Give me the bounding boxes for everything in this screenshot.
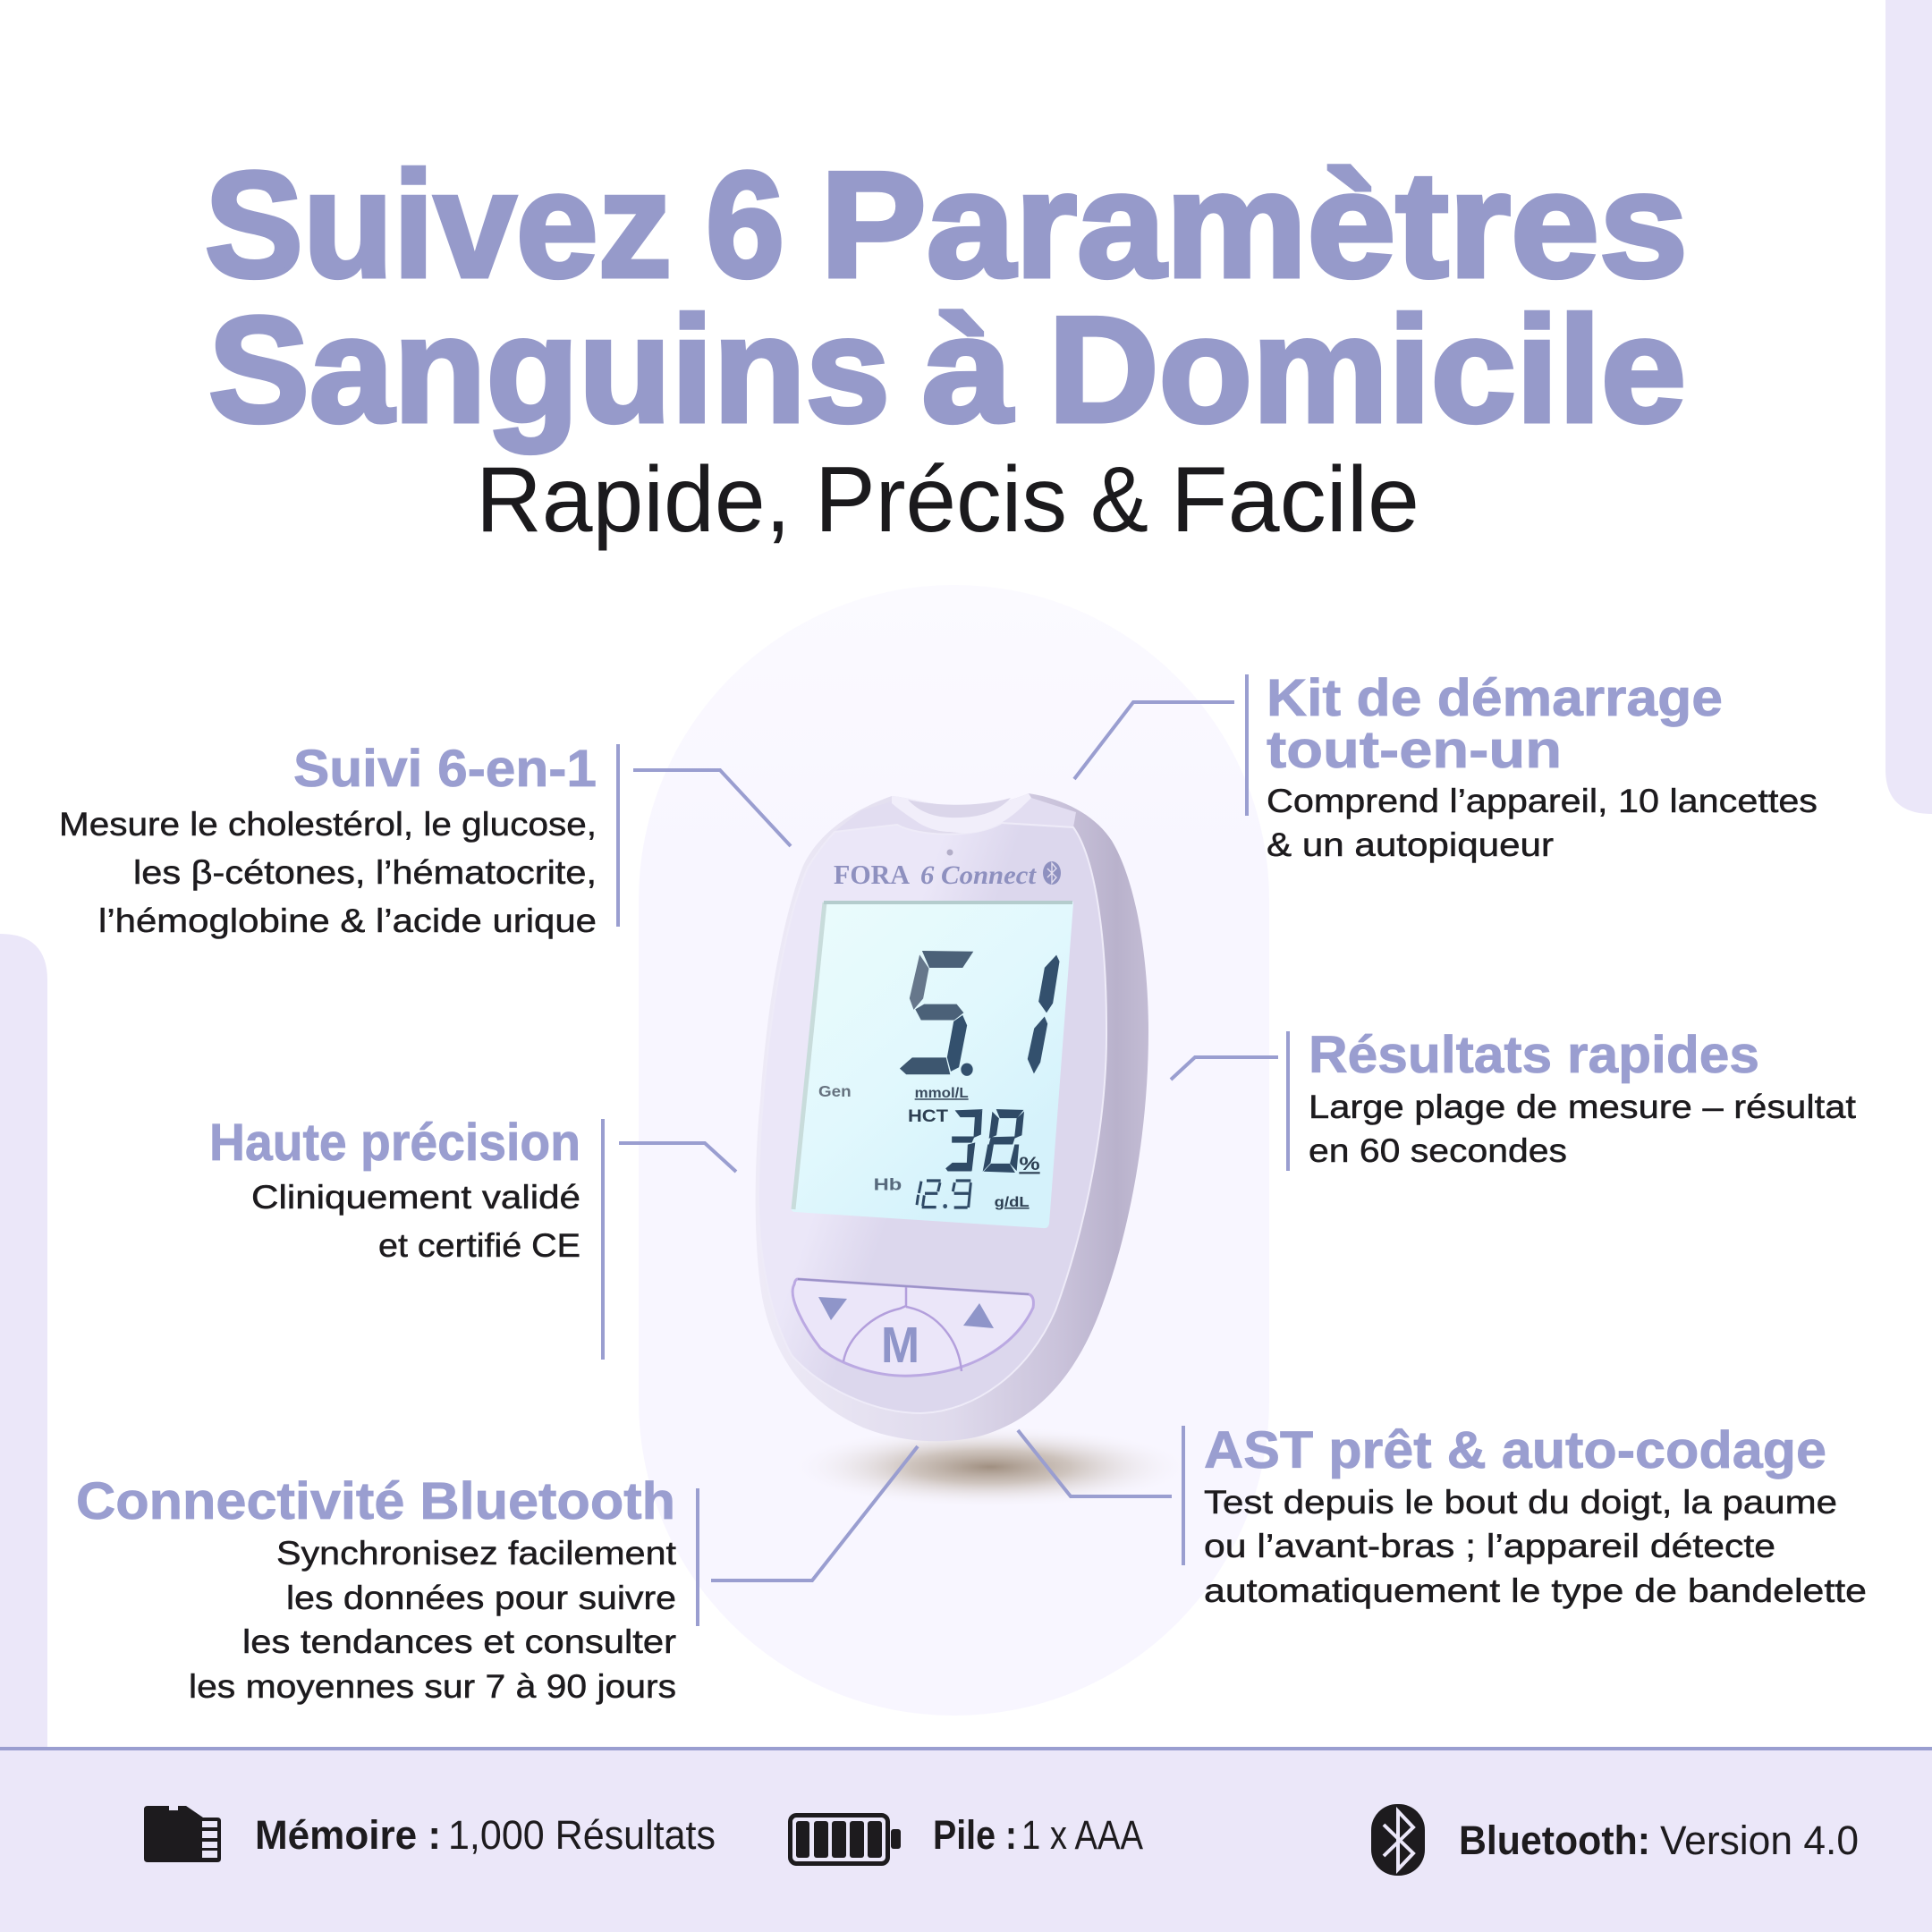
text block: les moyennes sur 7 à 90 jours (189, 1668, 676, 1705)
device shadow (789, 1426, 1191, 1508)
panel: capsule behind device (639, 585, 1269, 1716)
text block (1204, 1484, 1867, 1609)
callout: Connectivité Bluetooth (76, 1446, 918, 1705)
text block: automatiquement le type de bandelette (1204, 1572, 1867, 1609)
leader line (1018, 1430, 1172, 1496)
brand label: 6 Connect (920, 860, 1038, 890)
battery spec (933, 1812, 1143, 1858)
text block: en 60 secondes (1309, 1132, 1567, 1169)
leader line (711, 1446, 918, 1580)
bluetooth spec (1459, 1818, 1859, 1863)
text block (59, 806, 597, 939)
icon: memory card (144, 1806, 221, 1862)
text block: Comprend l’appareil, 10 lancettes (1267, 783, 1818, 819)
subtitle: Rapide, (476, 448, 791, 552)
callout: Kit de démarrage (1074, 669, 1818, 863)
screen inner edges (793, 902, 825, 1209)
unit g/dL: g/dL (995, 1194, 1030, 1210)
heading: AST prêt & auto-codage (1204, 1421, 1826, 1479)
hemoglobin value 12.9 (917, 1181, 970, 1208)
text block: les β-cétones, l’hématocrite, (133, 854, 597, 891)
title: Paramètres (820, 140, 1688, 309)
leader line (1074, 702, 1234, 779)
leader line (619, 1143, 736, 1172)
text block: & un autopiqueur (1267, 826, 1554, 863)
leader line (1171, 1057, 1278, 1080)
memory spec: Mémoire : (255, 1812, 441, 1858)
panel: side decoration left (0, 934, 47, 1750)
text block: Test depuis le bout du doigt, la paume (1204, 1484, 1837, 1521)
memory spec: 1,000 Résultats (448, 1812, 716, 1858)
battery spec: Pile : (933, 1812, 1017, 1858)
button panel (792, 1279, 1033, 1376)
divider (1182, 1426, 1185, 1565)
strip port (892, 793, 1031, 833)
percent sign: % (1019, 1154, 1040, 1174)
text block (189, 1535, 677, 1705)
LCD readings (818, 952, 1059, 1210)
title: Suivez (205, 140, 672, 309)
down arrow button (818, 1297, 847, 1320)
title: à (922, 285, 1013, 453)
subtitle: Facile (1171, 448, 1419, 552)
subtitle (476, 448, 1419, 552)
text block (1267, 783, 1818, 863)
subtitle: & (1090, 448, 1148, 552)
divider (1245, 674, 1249, 816)
text block: les données pour suivre (286, 1580, 676, 1616)
heading: Kit de démarrage (1267, 669, 1723, 727)
title: Domicile (1048, 285, 1686, 453)
text block (1309, 1089, 1857, 1169)
heading (1267, 669, 1723, 779)
device body (756, 793, 1148, 1441)
divider (616, 744, 620, 927)
hematocrit value 38 (946, 1110, 1023, 1172)
screen top edge (824, 901, 1072, 904)
bluetooth spec: Bluetooth: (1459, 1818, 1650, 1863)
text block: ou l’avant-bras ; l’appareil détecte (1204, 1528, 1775, 1564)
device face (758, 823, 1106, 1413)
divider (696, 1488, 699, 1626)
icon: bluetooth (1371, 1804, 1425, 1876)
text block: les tendances et consulter (242, 1623, 676, 1660)
text block: Synchronisez facilement (276, 1535, 677, 1572)
heading: tout-en-un (1267, 721, 1562, 779)
brand label (834, 850, 1061, 890)
upper shoulder (835, 798, 1076, 832)
title: Sanguins (208, 285, 890, 453)
text block (251, 1179, 580, 1264)
subtitle: Précis (815, 448, 1067, 552)
text block: et certifié CE (378, 1227, 580, 1264)
memory spec (255, 1812, 716, 1858)
heading: Haute précision (209, 1114, 580, 1172)
leader line (633, 770, 791, 846)
footer band (0, 1747, 1932, 1932)
callout: AST prêt et auto-codage (1018, 1421, 1867, 1609)
text block: l’hémoglobine & l’acide urique (98, 902, 597, 939)
glucose value 5.1 (901, 952, 1059, 1076)
heading: Suivi 6-en-1 (293, 740, 597, 798)
unit mmol/L: mmol/L (915, 1086, 969, 1101)
divider (1286, 1031, 1290, 1171)
callout: Résultats rapides (1171, 1026, 1857, 1171)
panel: corner decoration top right (1885, 0, 1932, 814)
up arrow button (963, 1303, 994, 1328)
text block: Large plage de mesure – résultat (1309, 1089, 1857, 1125)
heading: Connectivité Bluetooth (76, 1472, 675, 1530)
LCD screen (792, 901, 1073, 1228)
brand label: FORA (834, 859, 911, 890)
Gen label: Gen (818, 1083, 852, 1100)
callout: Haute précision (209, 1114, 736, 1360)
divider (601, 1119, 605, 1360)
M button label: M (881, 1317, 919, 1374)
icon: battery (791, 1816, 901, 1864)
HCT label: HCT (908, 1106, 949, 1125)
device: glucose meter (756, 793, 1148, 1441)
decimal point (943, 1204, 947, 1208)
text block: Mesure le cholestérol, le glucose, (59, 806, 597, 843)
callout: Suivi 6-en-1 (59, 740, 791, 939)
text block: Cliniquement validé (251, 1179, 580, 1216)
Hb label: Hb (874, 1175, 902, 1193)
battery spec: 1 x AAA (1021, 1812, 1143, 1858)
port slot (908, 798, 1011, 818)
heading: Résultats rapides (1309, 1026, 1759, 1084)
title: 6 (706, 140, 784, 309)
title (205, 140, 1688, 453)
bluetooth spec: Version 4.0 (1660, 1818, 1859, 1863)
